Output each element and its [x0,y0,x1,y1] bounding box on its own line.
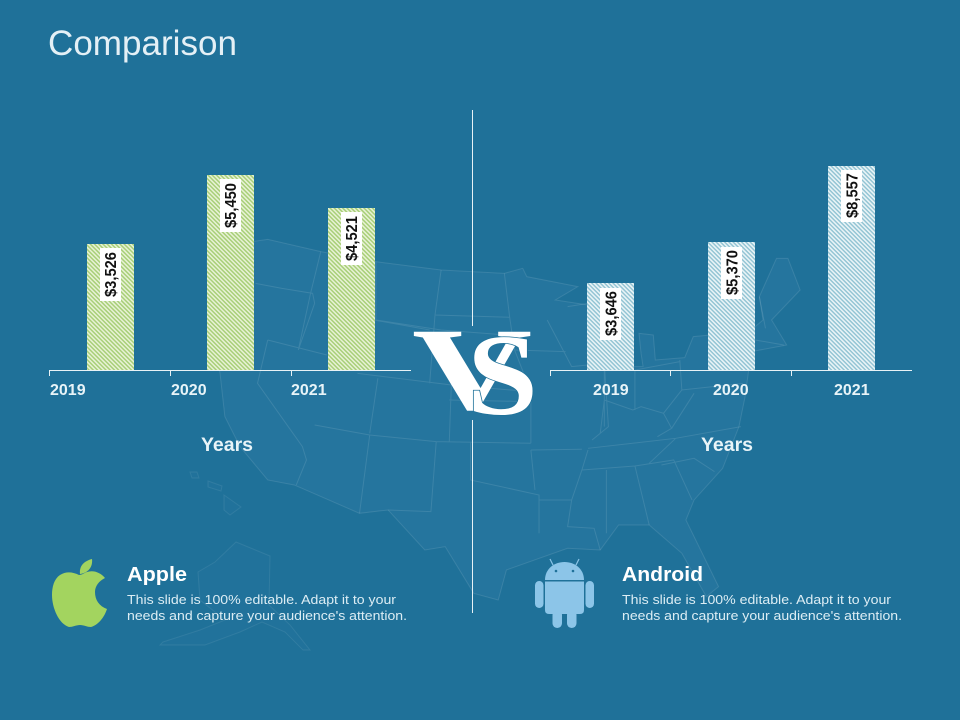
description: needs and capture your audience's attention. [622,608,902,623]
value label 4521: $4,521 [344,216,361,261]
bar 2019 [87,244,134,370]
category labels: 2021 [291,382,327,399]
axis [50,370,411,376]
icon: android [535,559,594,628]
category labels: 2020 [171,382,207,399]
heading: Android [622,564,703,586]
bar 2020 [708,242,755,370]
bar 2019 [587,283,634,370]
VS emblem: V [412,304,532,435]
axis [550,370,912,376]
bar chart: Android [550,166,912,456]
bar chart: Apple [50,175,411,456]
mainland [207,239,800,600]
bar 2021 [828,166,875,370]
value label 3526: $3,526 [103,252,120,297]
category labels: 2020 [713,382,749,399]
description: This slide is 100% editable. Adapt it to your [622,592,892,607]
description: This slide is 100% editable. Adapt it to your [127,592,397,607]
vertical divider [472,110,474,613]
map: United States [160,239,800,650]
title: Comparison [48,24,237,63]
icon: apple [52,559,107,627]
category labels [593,382,870,399]
axis title: Years [701,434,753,456]
bar 2021 [328,208,375,370]
heading: Apple [127,564,187,586]
VS emblem: S [467,311,538,440]
text block: Apple [127,564,407,623]
category labels: 2021 [834,382,870,399]
value label 5450: $5,450 [223,183,240,228]
category labels: 2019 [593,382,629,399]
value label 8557: $8,557 [844,173,862,218]
text block: Android [622,564,902,623]
value label 5370: $5,370 [724,250,742,295]
Alaska and Hawaii [160,472,310,650]
description [127,592,407,623]
value label 3646: $3,646 [604,291,620,336]
description [622,592,902,623]
description: needs and capture your audience's attention. [127,608,407,623]
axis title: Years [201,434,253,456]
bar 2020 [207,175,254,370]
category labels [50,382,327,399]
category labels: 2019 [50,382,86,399]
